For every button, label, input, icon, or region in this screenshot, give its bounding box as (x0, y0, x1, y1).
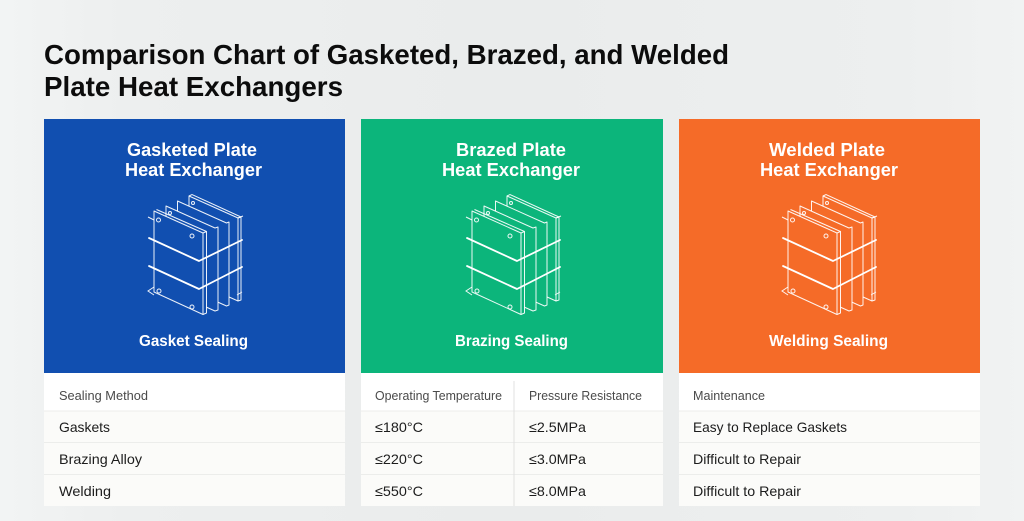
table: temperature and pressure (361, 373, 663, 506)
cell: temperature 550: ≤550°C (375, 483, 423, 499)
heading: welded: Heat Exchanger (760, 160, 898, 180)
table: sealing method (44, 373, 345, 506)
icon: brazed plate stack (466, 194, 561, 314)
cell: difficult to repair, welded: Difficult to Repair (693, 483, 801, 499)
title (44, 39, 729, 102)
cell: temperature 220: ≤220°C (375, 451, 423, 467)
heading: brazed (442, 140, 580, 180)
column header: maintenance: Maintenance (693, 389, 765, 403)
cell: gaskets: Gaskets (59, 419, 110, 435)
heading: gasketed (125, 140, 262, 180)
cell: welding: Welding (59, 483, 111, 499)
cell: pressure 3.0: ≤3.0MPa (529, 451, 586, 467)
label: gasket sealing: Gasket Sealing (139, 333, 248, 350)
heading: welded: Welded Plate (769, 140, 885, 160)
cell: pressure 2.5: ≤2.5MPa (529, 419, 586, 435)
heading: gasketed: Heat Exchanger (125, 160, 262, 180)
label: welding sealing: Welding Sealing (769, 333, 888, 350)
cell: easy to replace gaskets: Easy to Replace Gaskets (693, 419, 847, 435)
cell: temperature 180: ≤180°C (375, 419, 423, 435)
column header: pressure resistance: Pressure Resistance (529, 389, 642, 403)
label: brazing sealing: Brazing Sealing (455, 333, 568, 350)
cell: brazing alloy: Brazing Alloy (59, 451, 142, 467)
cell: difficult to repair, brazed: Difficult to Repair (693, 451, 801, 467)
panel: brazed plate heat exchanger (361, 119, 663, 373)
icon: welded plate stack (782, 194, 877, 314)
column header: sealing method: Sealing Method (59, 389, 148, 403)
heading: welded (760, 140, 898, 180)
heading: gasketed: Gasketed Plate (127, 140, 257, 160)
panel: gasketed plate heat exchanger (44, 119, 345, 373)
table: maintenance (679, 373, 980, 506)
heading: brazed: Heat Exchanger (442, 160, 580, 180)
cell: pressure 8.0: ≤8.0MPa (529, 483, 586, 499)
title: Comparison Chart of Gasketed, Brazed, and Welded (44, 39, 729, 70)
heading: brazed: Brazed Plate (456, 140, 566, 160)
column header: operating temperature: Operating Temperature (375, 389, 502, 403)
title: Plate Heat Exchangers (44, 71, 343, 102)
icon: gasketed plate stack (148, 194, 243, 314)
panel: welded plate heat exchanger (679, 119, 980, 373)
